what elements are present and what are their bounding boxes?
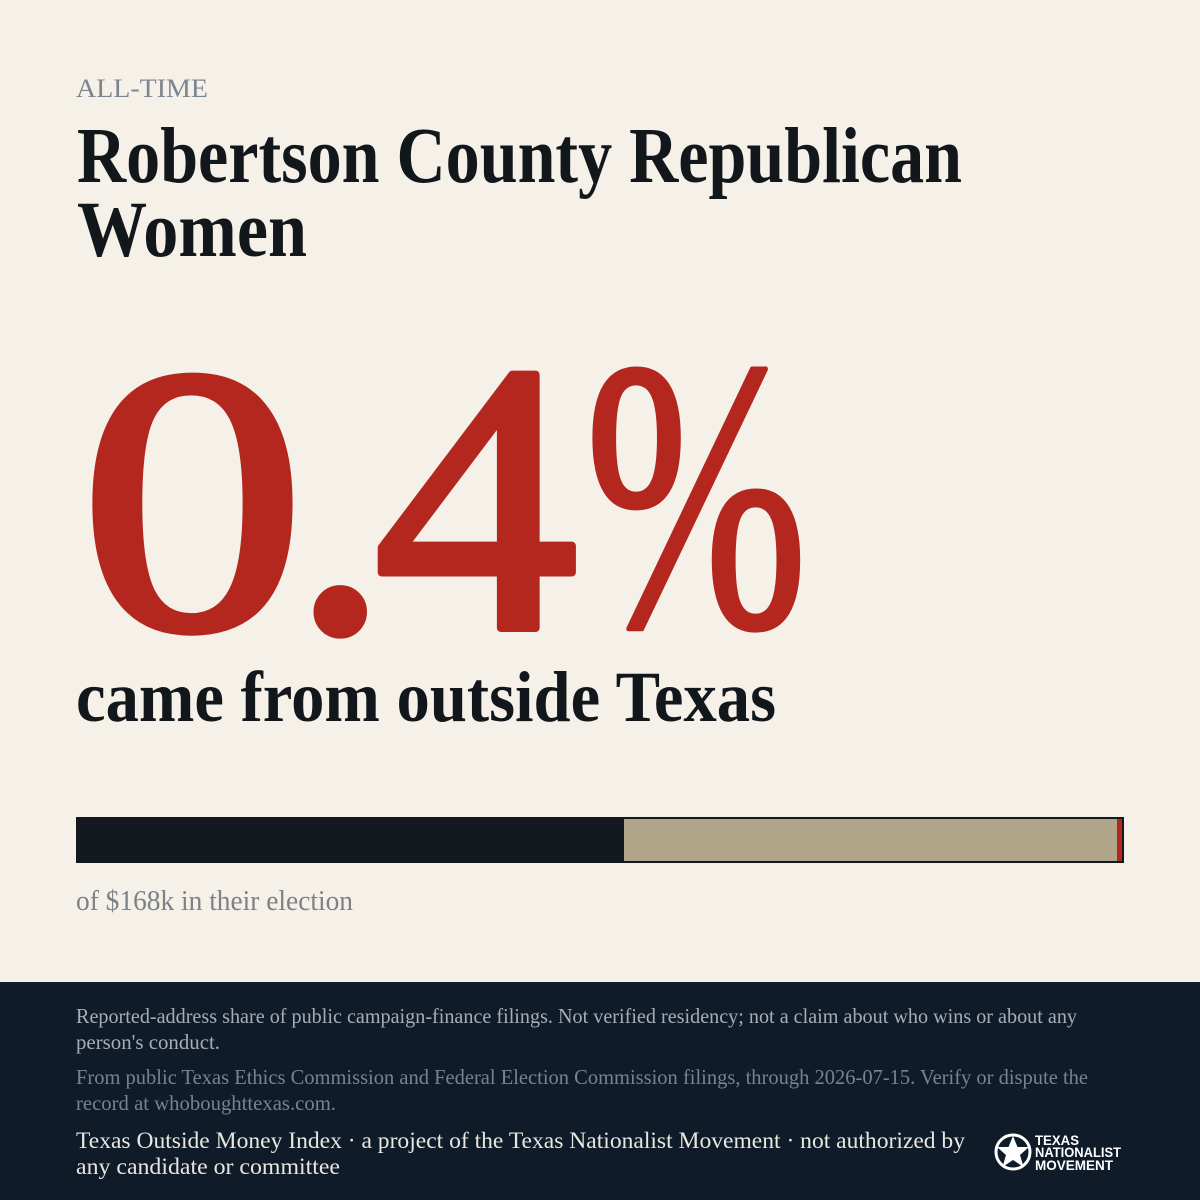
- bar caption: of $168k in their election: [76, 885, 353, 917]
- source text: From public Texas Ethics Commission and Federal Election Commission filings, through 2026-07-15. Verify or dispute the: [76, 1065, 1088, 1089]
- attribution text: Texas Outside Money Index · a project of the Texas Nationalist Movement · not authorized by: [76, 1128, 965, 1153]
- title: [77, 113, 962, 274]
- attribution text: any candidate or committee: [76, 1154, 340, 1179]
- attribution text: [76, 1128, 965, 1179]
- stacked bar: [76, 817, 1124, 863]
- disclaimer text: person's conduct.: [76, 1030, 220, 1054]
- big percentage figure: %: [585, 282, 808, 709]
- disclaimer text: Reported-address share of public campaign-finance filings. Not verified residency; not a claim about who wins or about any: [76, 1004, 1077, 1028]
- logo: Texas Nationalist Movement: [996, 1133, 1122, 1173]
- logo: Texas Nationalist Movement: TEXAS: [1035, 1133, 1079, 1148]
- footer panel: [0, 982, 1200, 1200]
- big percentage figure: [80, 282, 808, 711]
- logo: Texas Nationalist Movement: MOVEMENT: [1035, 1158, 1114, 1173]
- eyebrow: time period: ALL-TIME: [76, 74, 208, 103]
- disclaimer text: [76, 1004, 1077, 1054]
- title: Robertson County Republican: [77, 113, 962, 200]
- source text: [76, 1065, 1088, 1115]
- source text: record at whoboughttexas.com.: [76, 1091, 336, 1115]
- big percentage figure: 0: [80, 291, 305, 710]
- logo: Texas Nationalist Movement: NATIONALIST: [1035, 1145, 1122, 1160]
- subheading: came from outside Texas: [76, 657, 776, 737]
- title: Women: [77, 187, 307, 274]
- big percentage figure: 4: [374, 284, 578, 711]
- big percentage figure: .: [299, 341, 382, 706]
